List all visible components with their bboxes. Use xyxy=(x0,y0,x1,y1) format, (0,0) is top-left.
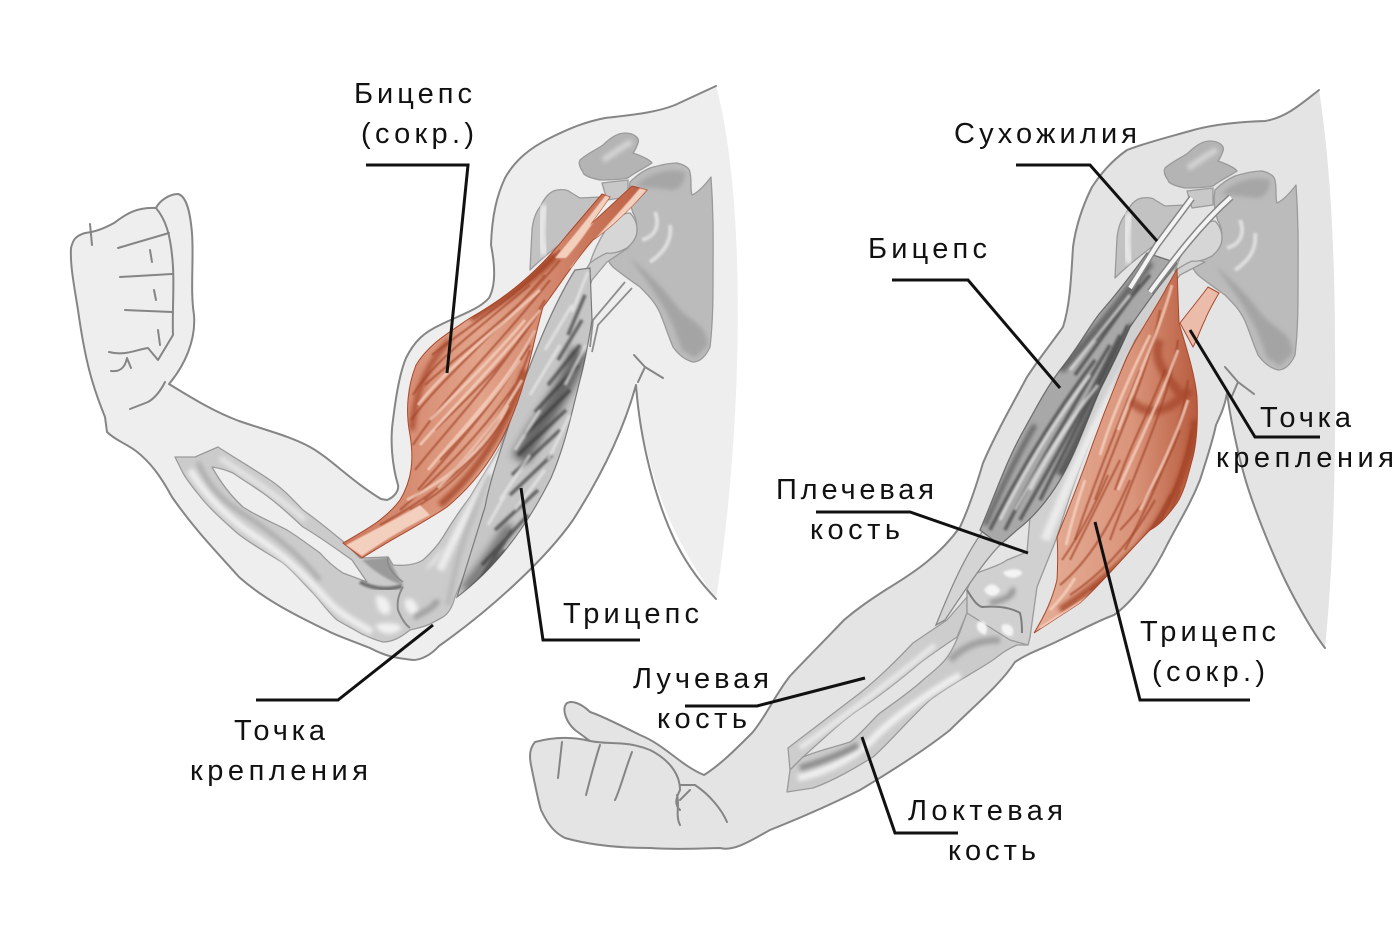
right humeral head xyxy=(1175,221,1222,271)
left forearm gap between bones xyxy=(212,467,367,582)
left arm skin silhouette xyxy=(71,86,738,660)
right arm outline xyxy=(530,90,1325,849)
left arm diagram: flexed arm xyxy=(71,86,738,660)
right radius bone xyxy=(788,597,967,770)
left scapula and shoulder bones xyxy=(530,133,713,362)
label: ulna xyxy=(908,795,1063,867)
leader line: contracted triceps xyxy=(1095,522,1250,700)
right fist finger lines xyxy=(558,741,727,825)
label: humerus: Плечевая xyxy=(776,474,934,506)
leader line: left attachment point xyxy=(256,625,433,700)
label: contracted triceps: (сокр.) xyxy=(1152,656,1265,688)
label: humerus xyxy=(776,474,934,546)
label: humerus: кость xyxy=(810,514,900,546)
left humeral head xyxy=(590,213,637,263)
left triceps muscle (relaxed) xyxy=(457,268,592,597)
leader line: radius xyxy=(685,678,865,706)
label: tendons: Сухожилия xyxy=(954,118,1137,150)
label: contracted biceps: (сокр.) xyxy=(361,118,474,150)
right arm skin silhouette xyxy=(530,90,1335,849)
leader line: left triceps xyxy=(521,488,640,640)
label: right attachment point: крепления xyxy=(1216,442,1394,474)
leader line: ulna xyxy=(862,737,958,833)
left forearm bones, elbow and humerus xyxy=(175,240,628,642)
left arm outline xyxy=(71,86,716,660)
left biceps pale tendons xyxy=(346,188,647,556)
label: contracted triceps: Трицепс xyxy=(1140,616,1276,648)
label: ulna: Локтевая xyxy=(908,795,1063,827)
left fist finger lines xyxy=(90,208,173,409)
leader line: tendons xyxy=(1016,165,1157,241)
label: radius xyxy=(633,663,769,735)
leader line: humerus xyxy=(816,512,1028,553)
label: right attachment point xyxy=(1216,402,1394,474)
right ulna bone xyxy=(787,613,1030,792)
label: radius: Лучевая xyxy=(633,663,769,695)
label: contracted biceps: Бицепс xyxy=(354,78,472,110)
right arm diagram: extended arm xyxy=(530,90,1335,849)
right biceps muscle (relaxed) xyxy=(936,253,1177,625)
leader line: right attachment point xyxy=(1190,330,1320,437)
label: left attachment point xyxy=(190,715,368,787)
label: radius: кость xyxy=(657,703,747,735)
label: right attachment point: Точка xyxy=(1260,402,1352,434)
label: contracted triceps xyxy=(1140,616,1276,688)
right forearm bone shading xyxy=(798,640,1000,778)
right scapula and shoulder bones xyxy=(1115,141,1298,370)
label: biceps: Бицепс xyxy=(868,233,987,265)
leader line: right biceps xyxy=(892,280,1060,388)
right humerus and elbow xyxy=(967,258,1205,645)
label: left attachment point: Точка xyxy=(234,715,326,747)
label: left triceps: Трицепс xyxy=(563,598,699,630)
left biceps muscle (contracted) xyxy=(343,186,647,558)
label: contracted biceps xyxy=(354,78,474,150)
right triceps muscle (contracted) xyxy=(1034,269,1219,633)
leader line: contracted biceps xyxy=(366,165,468,373)
label: ulna: кость xyxy=(948,835,1036,867)
label: left attachment point: крепления xyxy=(190,755,368,787)
right biceps tendons xyxy=(1130,197,1231,292)
right triceps upper tendon xyxy=(1180,287,1219,347)
